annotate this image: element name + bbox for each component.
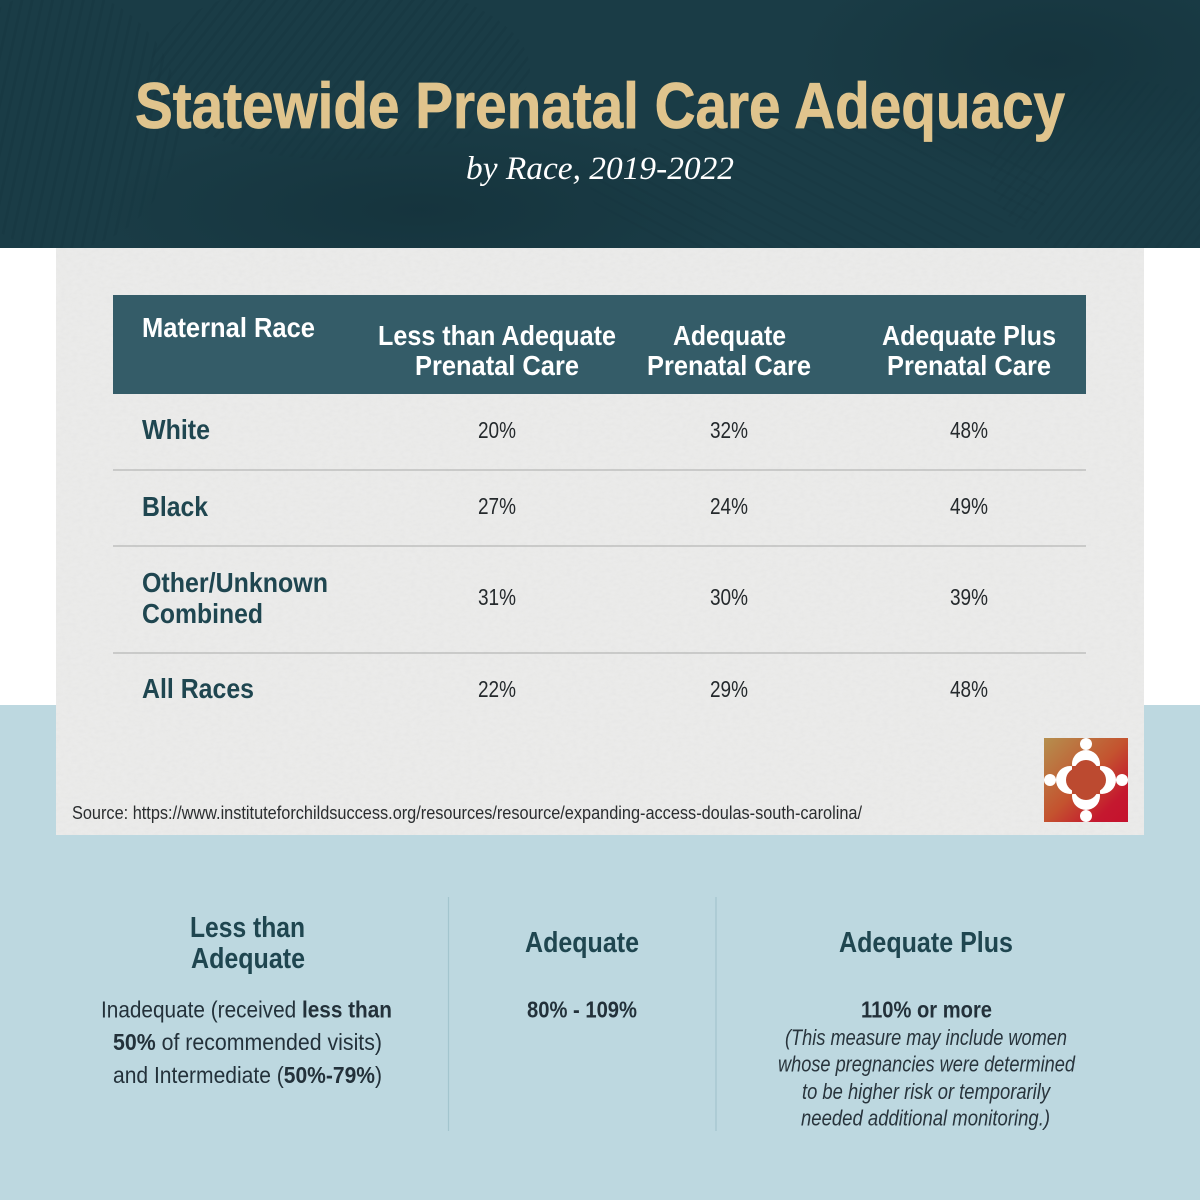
row: Other/Unknown Combined: Other/Unknown xyxy=(142,567,328,598)
legend: adequate plus: whose pregnancies were determined xyxy=(778,1052,1076,1076)
legend: adequate: 80% - 109% xyxy=(527,996,637,1022)
legend: less than adequate: 50% of recommended visits) xyxy=(113,1029,382,1055)
icon: logo xyxy=(1044,738,1128,822)
title: Statewide Prenatal Care Adequacy xyxy=(135,69,1065,142)
legend: adequate: Adequate xyxy=(525,927,639,959)
table header row xyxy=(113,295,1086,394)
row: White: 32% xyxy=(710,417,748,443)
table header row: Prenatal Care xyxy=(887,350,1051,381)
legend: adequate plus: 110% or more xyxy=(861,996,992,1022)
row: All Races: All Races xyxy=(142,673,254,704)
subtitle: by Race, 2019-2022 xyxy=(466,151,734,187)
row: Other/Unknown Combined: 30% xyxy=(710,584,748,610)
legend: adequate plus: (This measure may include women xyxy=(785,1025,1067,1050)
row: Black xyxy=(142,491,988,522)
legend: adequate plus: Adequate Plus xyxy=(839,927,1013,959)
legend: adequate plus: to be higher risk or temporarily xyxy=(802,1079,1052,1104)
legend: less than adequate: Less than xyxy=(190,912,305,944)
panel: data table on paper card xyxy=(56,248,1144,835)
row: Other/Unknown Combined xyxy=(142,567,988,629)
table header row: Adequate Plus xyxy=(882,320,1056,351)
row: All Races: 29% xyxy=(710,676,748,702)
row: Black: 27% xyxy=(478,493,516,519)
row: Other/Unknown Combined: Combined xyxy=(142,598,263,629)
table header row: Prenatal Care xyxy=(415,350,579,381)
row: White: 20% xyxy=(478,417,516,443)
row: All Races: 22% xyxy=(478,676,516,702)
legend: less than adequate: Inadequate (received less than xyxy=(101,996,392,1022)
row: White: White xyxy=(142,414,210,445)
table header row: Less than Adequate xyxy=(378,320,616,351)
legend: adequate plus: needed additional monitoring.) xyxy=(801,1106,1050,1130)
row: Black: 24% xyxy=(710,493,748,519)
row: Other/Unknown Combined: 39% xyxy=(950,584,988,610)
row: Black: 49% xyxy=(950,493,988,519)
row: White: 48% xyxy=(950,417,988,443)
row: All Races xyxy=(142,673,988,704)
row: Black: Black xyxy=(142,491,208,522)
row: Other/Unknown Combined: 31% xyxy=(478,584,516,610)
legend: less than adequate: Adequate xyxy=(191,943,305,975)
legend: less than adequate xyxy=(101,912,392,1088)
legend: less than adequate: and Intermediate (50%-79%) xyxy=(113,1062,382,1088)
legend: adequate plus xyxy=(778,927,1076,1130)
table header row: Adequate xyxy=(673,320,786,351)
row: All Races: 48% xyxy=(950,676,988,702)
source line: Source: https://www.instituteforchildsuccess.org/resources/resource/expanding-access-doulas-south-carolina/ xyxy=(72,803,862,823)
legend: adequate xyxy=(525,927,639,1022)
row: White xyxy=(142,414,988,445)
table header row: Maternal Race xyxy=(142,312,315,343)
header banner xyxy=(0,0,1200,248)
table header row: Prenatal Care xyxy=(647,350,811,381)
